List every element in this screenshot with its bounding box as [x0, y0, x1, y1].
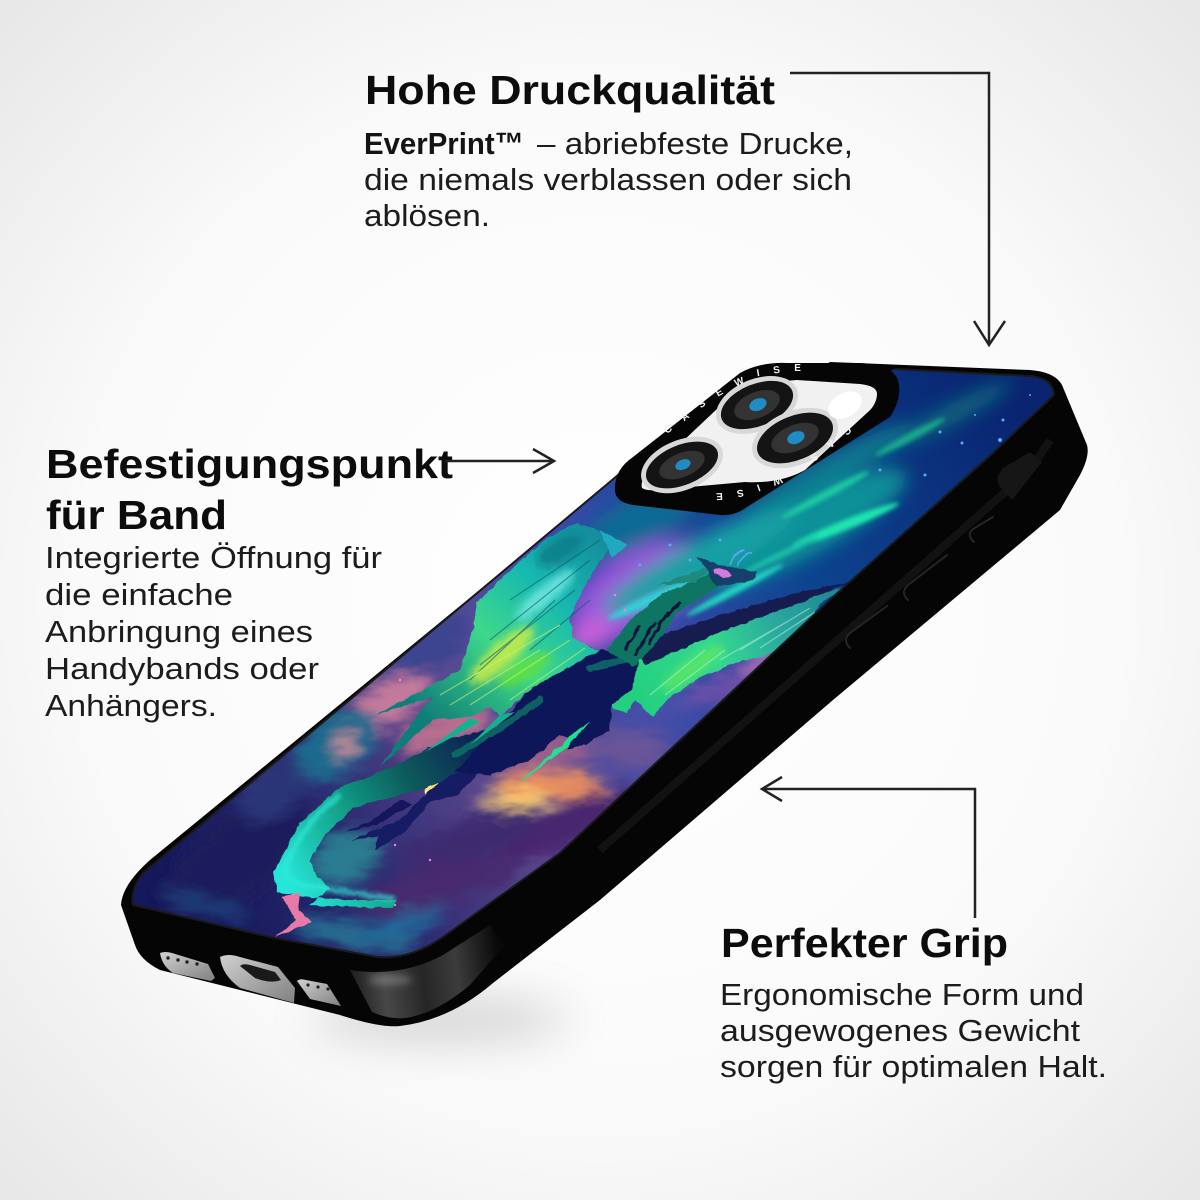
aurora glow — [556, 374, 1016, 660]
body text — [45, 540, 382, 723]
tail — [273, 727, 500, 908]
right wing membrane — [608, 588, 845, 717]
head accent — [714, 568, 732, 578]
reflection in water — [275, 893, 312, 937]
phone case — [121, 362, 1088, 1026]
printed artwork: dragon and aurora — [133, 369, 1053, 956]
body text: EverPrint™ — [364, 126, 524, 161]
right wing glow — [658, 642, 726, 694]
neck spines — [658, 568, 708, 586]
wing highlights — [463, 527, 589, 694]
head — [697, 557, 757, 586]
body text: Anhängers. — [45, 688, 217, 723]
camera module — [614, 362, 900, 516]
arrow to case surface — [790, 73, 1005, 345]
stars — [638, 394, 1031, 566]
arrow to case side — [762, 777, 975, 918]
sky gradient — [133, 369, 1053, 956]
sky gap — [424, 783, 438, 795]
body text: Anbringung eines — [45, 614, 313, 649]
flash — [823, 386, 867, 424]
head crest — [730, 550, 752, 565]
body — [455, 640, 640, 775]
body scales — [455, 660, 625, 755]
wing texture streaks — [440, 540, 815, 705]
left wing — [375, 523, 612, 767]
lens right — [743, 396, 847, 480]
heading: Befestigungspunkt — [46, 441, 453, 487]
callout: print quality — [364, 67, 1005, 345]
body text — [720, 977, 1107, 1084]
brand text bottom: CASEWISE — [716, 428, 851, 500]
rear leg — [352, 772, 478, 850]
camera plate — [615, 363, 899, 515]
side buttons — [846, 517, 993, 648]
lens left — [633, 426, 731, 504]
charging port — [220, 955, 295, 1003]
wing spikes — [425, 712, 515, 752]
sparkle — [394, 594, 651, 906]
highlight on corner — [368, 976, 412, 984]
body text: Integrierte Öffnung für — [45, 540, 382, 575]
screen rim — [132, 369, 1054, 957]
camera opening — [642, 380, 877, 490]
side switch — [998, 452, 1042, 500]
heading: für Band — [46, 492, 227, 538]
brand text top: CASEWISE — [664, 364, 801, 433]
body text — [364, 126, 853, 233]
body text: ausgewogenes Gewicht — [720, 1013, 1080, 1048]
callout: perfect grip — [720, 777, 1107, 1084]
heading: Hohe Druckqualität — [365, 67, 775, 113]
aurora streaks — [606, 415, 947, 623]
rear leg 2 — [345, 800, 412, 832]
dragon — [273, 523, 850, 908]
body text: Ergonomische Form und — [720, 977, 1084, 1012]
callout: strap attachment — [45, 441, 554, 723]
tail glow — [285, 795, 395, 899]
body text: die niemals verblassen oder sich — [364, 162, 852, 197]
neck stripes — [625, 602, 680, 655]
neck — [607, 570, 717, 667]
front leg — [567, 705, 612, 750]
heading — [46, 441, 453, 538]
right speaker — [297, 979, 341, 1006]
right wing arm — [633, 582, 850, 665]
lens top — [707, 365, 807, 445]
arrow to attachment point — [445, 449, 554, 473]
body text: ablösen. — [364, 198, 490, 233]
phone drop shadow — [310, 996, 570, 1044]
body text: sorgen für optimalen Halt. — [720, 1049, 1107, 1084]
body text: die einfache — [45, 577, 233, 612]
body text: – abriebfeste Drucke, — [537, 126, 853, 161]
corner gloss — [350, 925, 505, 1018]
case body — [121, 362, 1088, 1026]
clouds and mountains — [157, 611, 774, 956]
wing claw — [600, 530, 628, 558]
green claw — [517, 722, 590, 785]
heading: Perfekter Grip — [721, 920, 1008, 966]
left speaker — [160, 952, 215, 981]
body text: Handybands oder — [45, 651, 319, 686]
